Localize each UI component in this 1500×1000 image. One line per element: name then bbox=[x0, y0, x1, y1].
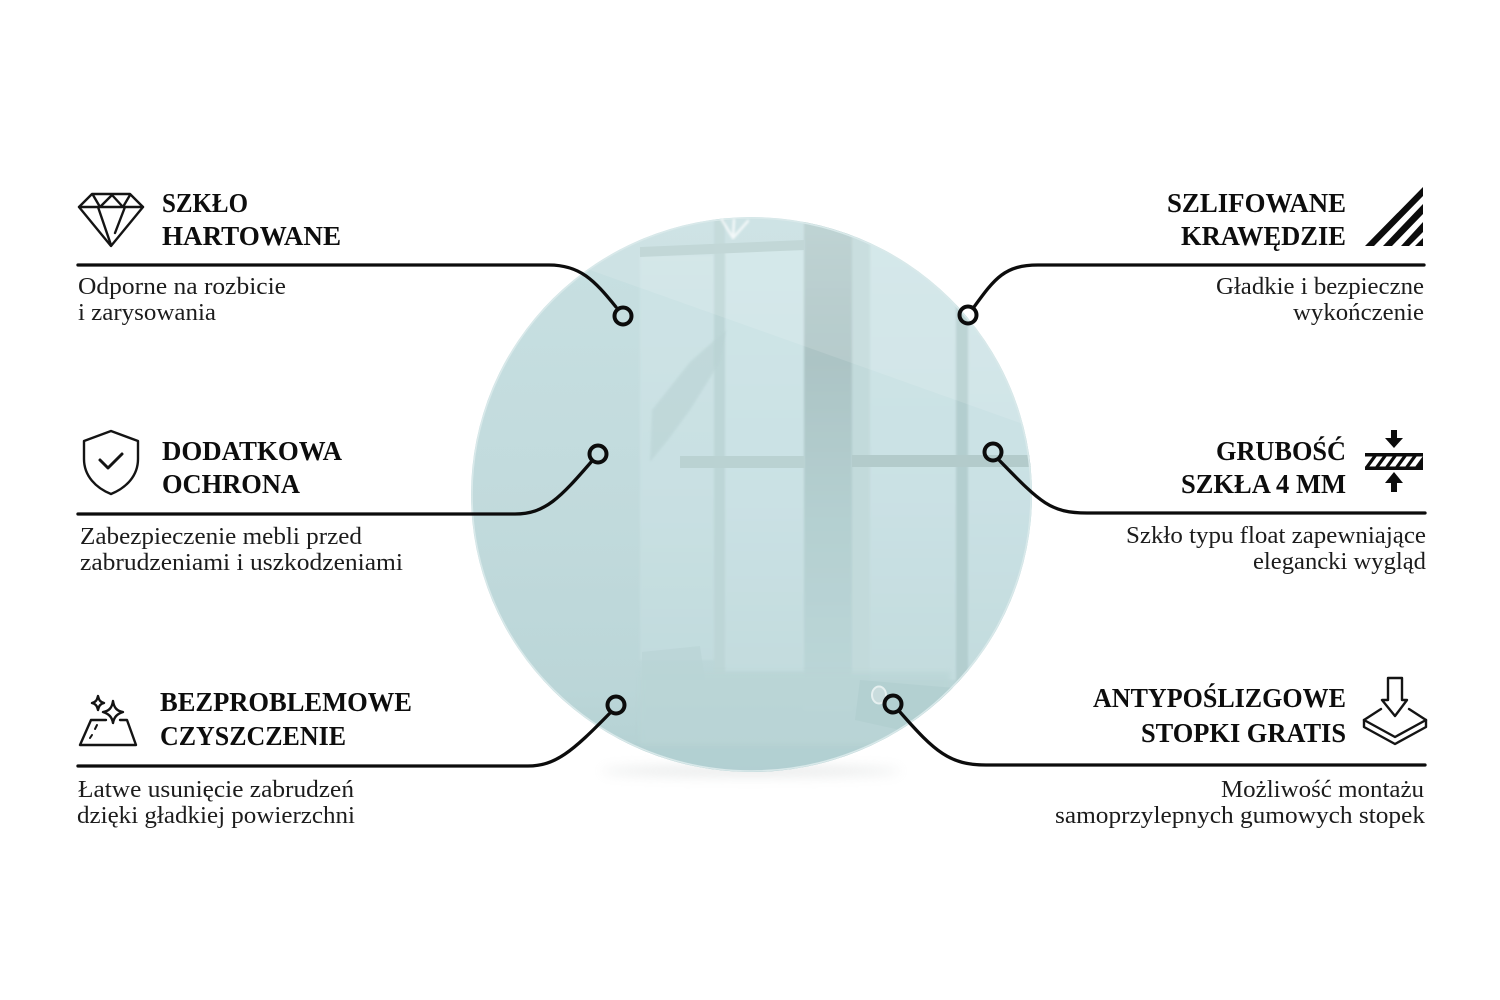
description: Możliwość montażu bbox=[1221, 777, 1424, 803]
description: wykończenie bbox=[1293, 300, 1424, 326]
heading: CZYSZCZENIE bbox=[160, 721, 346, 751]
description: dzięki gładkiej powierzchni bbox=[77, 803, 355, 829]
heading bbox=[1093, 683, 1346, 748]
description bbox=[1055, 777, 1425, 829]
description bbox=[77, 777, 355, 829]
connector bbox=[884, 696, 1425, 765]
heading bbox=[1181, 436, 1346, 499]
heading: SZLIFOWANE bbox=[1167, 188, 1346, 218]
heading bbox=[162, 436, 342, 499]
description: i zarysowania bbox=[78, 300, 216, 326]
description: zabrudzeniami i uszkodzeniami bbox=[80, 550, 403, 576]
heading: SZKŁO bbox=[162, 188, 248, 218]
connector bbox=[78, 696, 624, 766]
panel: szlifowane krawędzie bbox=[960, 187, 1424, 326]
glass disc bbox=[470, 200, 1040, 782]
icon: thickness bbox=[1365, 430, 1423, 492]
rubber foot bbox=[872, 686, 886, 704]
heading: STOPKI GRATIS bbox=[1141, 718, 1346, 748]
heading: OCHRONA bbox=[162, 469, 300, 499]
connector bbox=[984, 444, 1425, 513]
heading: SZKŁA 4 MM bbox=[1181, 469, 1346, 499]
description: Gładkie i bezpieczne bbox=[1216, 274, 1424, 300]
icon: sparkle surface bbox=[80, 696, 136, 745]
glare bbox=[722, 220, 748, 238]
description bbox=[80, 524, 403, 576]
connector bbox=[78, 446, 606, 514]
heading: GRUBOŚĆ bbox=[1216, 436, 1346, 466]
panel: bezproblemowe czyszczenie bbox=[77, 687, 624, 829]
description: elegancki wygląd bbox=[1253, 549, 1426, 575]
description bbox=[1126, 523, 1426, 575]
heading bbox=[162, 188, 341, 251]
description: Szkło typu float zapewniające bbox=[1126, 523, 1426, 549]
panel: grubość szkła bbox=[984, 430, 1426, 575]
connector bbox=[960, 265, 1424, 324]
icon: adhesive feet bbox=[1364, 678, 1426, 744]
description bbox=[78, 274, 286, 326]
heading: ANTYPOŚLIZGOWE bbox=[1093, 683, 1346, 713]
heading: DODATKOWA bbox=[162, 436, 342, 466]
icon: ground edge stripes bbox=[1365, 187, 1423, 246]
panel: dodatkowa ochrona bbox=[78, 431, 606, 576]
heading: KRAWĘDZIE bbox=[1181, 221, 1346, 251]
heading bbox=[1167, 188, 1346, 251]
infographic canvas bbox=[76, 187, 1428, 828]
description bbox=[1216, 274, 1424, 326]
description: Łatwe usunięcie zabrudzeń bbox=[78, 777, 354, 803]
connector bbox=[78, 265, 632, 324]
icon: diamond bbox=[79, 194, 143, 246]
heading: HARTOWANE bbox=[162, 221, 341, 251]
heading: BEZPROBLEMOWE bbox=[160, 687, 412, 717]
description: samoprzylepnych gumowych stopek bbox=[1055, 803, 1425, 829]
description: Zabezpieczenie mebli przed bbox=[80, 524, 362, 550]
panel: antypoślizgowe stopki bbox=[884, 678, 1426, 829]
panel: szkło hartowane bbox=[78, 188, 632, 326]
heading bbox=[160, 687, 412, 751]
icon: shield bbox=[84, 431, 138, 494]
description: Odporne na rozbicie bbox=[78, 274, 286, 300]
